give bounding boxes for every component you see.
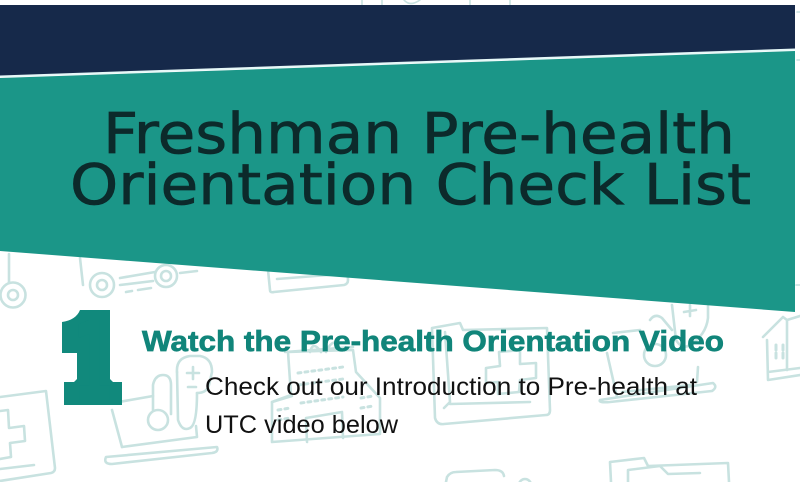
icon: stethoscope fragment left [0,254,26,308]
description line 2: UTC video below [205,411,399,439]
icon: first aid folder left [0,391,55,481]
icon: laptop right [600,305,715,402]
title line 1: Freshman Pre-health [103,102,735,167]
icon: top edge fragments [362,0,800,285]
icon: stethoscope fragment middle [80,258,197,297]
teal title banner [0,51,795,312]
step number 1: 1 [72,298,114,426]
step number 1 [62,298,122,426]
icon: folder bottom [610,458,729,482]
icon: book with cross [432,323,550,424]
step heading: Watch the Pre-health Orientation Video [142,326,724,358]
white divider line [0,50,795,76]
icon: clipboard fragment [268,262,348,292]
navy header band [0,5,795,76]
icon: hospital building center [272,343,380,442]
step description [205,373,697,439]
icon: bottom fragment [446,470,531,482]
title line 2: Orientation Check List [70,153,751,218]
icon: laptop with thermometer and pill [105,356,217,464]
title [70,102,751,218]
description line 1: Check out our Introduction to Pre-health at [205,373,697,401]
icon: hospital right [763,316,800,380]
